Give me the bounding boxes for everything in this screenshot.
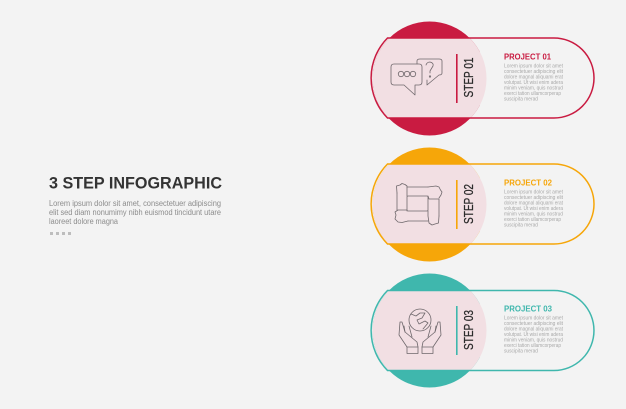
panel: step 2: volutpat. Ut wisi enim adera <box>504 206 563 212</box>
pale circle band <box>372 164 486 244</box>
description <box>49 199 222 226</box>
panel: step 3: minim veniam, quis nostrud <box>504 338 563 344</box>
panel: step 3: volutpat. Ut wisi enim adera <box>504 332 563 338</box>
divider <box>456 180 458 229</box>
panel: step 3: suscipita merad <box>504 349 538 355</box>
panel: step 1: Lorem ipsum dolor sit amet <box>504 64 564 70</box>
panel: step 3: Lorem ipsum dolor sit amet <box>504 316 564 322</box>
icon: hands holding globe <box>399 309 441 354</box>
panel: step 1: dolore magnal aliquami erat <box>504 75 564 81</box>
panel: step 2: suscipita merad <box>504 223 538 229</box>
pill outline <box>371 164 594 244</box>
panel: step 2: dolore magnal aliquami erat <box>504 201 564 207</box>
panel: step 2: minim veniam, quis nostrud <box>504 212 563 218</box>
pagination dots <box>50 232 71 235</box>
band background <box>480 290 594 370</box>
pill outline <box>371 38 594 118</box>
panel: step 3: consectetuer adipiscing elit <box>504 321 564 327</box>
colored circle <box>372 274 486 388</box>
panel: step 2 <box>371 148 594 262</box>
step label: STEP 03 <box>462 310 476 350</box>
panel: step 3: dolore magnal aliquami erat <box>504 327 564 333</box>
panel: step 1: minim veniam, quis nostrud <box>504 86 563 92</box>
icon: speech bubbles <box>391 59 442 95</box>
panel: step 1: consectetuer adipiscing elit <box>504 69 564 75</box>
band background <box>480 164 594 244</box>
description: Lorem ipsum dolor sit amet, consectetuer adipiscing <box>49 199 221 208</box>
step label: STEP 02 <box>462 184 476 224</box>
band background <box>480 38 594 118</box>
colored circle <box>372 22 486 136</box>
description: elit sed diam nonumimy nibh euismod tincidunt utare <box>49 208 222 217</box>
icon: four linked hands <box>395 184 442 225</box>
panel: step 1 <box>371 22 594 136</box>
panel: step 1: volutpat. Ut wisi enim adera <box>504 80 563 86</box>
pale circle band <box>372 38 486 118</box>
panel: step 1: suscipita merad <box>504 97 538 103</box>
pill outline <box>371 290 594 370</box>
divider <box>456 306 458 355</box>
panel: step 1: exerci tation ullamcorperap <box>504 91 561 97</box>
panel: step 3 <box>371 274 594 388</box>
pale circle band <box>372 291 486 370</box>
step label: STEP 01 <box>462 57 476 98</box>
project text: PROJECT 01 <box>504 52 551 62</box>
panel: step 2: consectetuer adipiscing elit <box>504 195 564 201</box>
left intro block <box>49 174 222 235</box>
divider <box>456 54 458 103</box>
colored circle <box>372 148 486 262</box>
description: laoreet dolore magna <box>49 217 118 226</box>
panel: step 3: exerci tation ullamcorperap <box>504 343 561 349</box>
project text: PROJECT 02 <box>504 178 552 188</box>
project text: PROJECT 03 <box>504 304 552 314</box>
panel: step 2: Lorem ipsum dolor sit amet <box>504 190 564 196</box>
panel: step 2: exerci tation ullamcorperap <box>504 217 561 223</box>
title: 3 STEP INFOGRAPHIC <box>49 174 222 192</box>
